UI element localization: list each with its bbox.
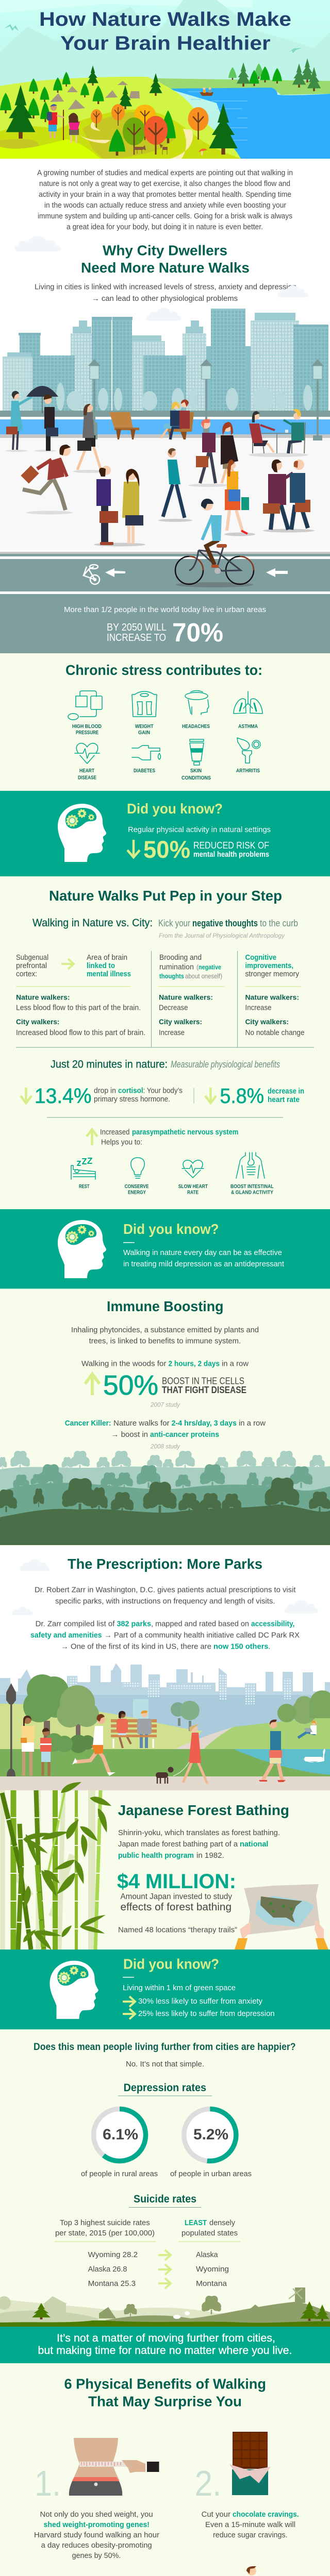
icon: bike lane marking <box>84 565 100 584</box>
suicide table: Wyoming 28.2 <box>88 2251 138 2259</box>
comparison table: Nature walkers: <box>16 993 70 1002</box>
icon: lungs <box>234 691 262 714</box>
text: Shinrin-yoku, which translates as forest bathing. <box>118 1829 280 1837</box>
heading: 6 Physical Benefits of Walking <box>64 2376 266 2392</box>
lake <box>168 88 330 159</box>
hikers <box>47 104 80 143</box>
label: SKIN <box>190 768 202 774</box>
label: HEART <box>79 768 94 774</box>
street lamps <box>88 359 324 440</box>
label: ASTHMA <box>238 724 258 730</box>
cancer killer text: Cancer Killer: <box>65 1419 111 1428</box>
promenade <box>0 411 330 550</box>
icon: waist with tape <box>69 2438 159 2496</box>
text: reduce sugar cravings. <box>213 2531 288 2539</box>
label: CONDITIONS <box>182 775 211 781</box>
panel: happier question <box>0 2029 330 2327</box>
intro text: a great idea for your body, but doing it in nature is even better. <box>67 223 263 231</box>
comparison table: cortex: <box>16 970 37 978</box>
stat 50%: REDUCED RISK OF <box>193 840 269 851</box>
text <box>202 2511 299 2539</box>
people: teal shirt walker <box>158 448 192 522</box>
panel: did you know 2 <box>0 1209 330 1288</box>
arrow up <box>87 1129 97 1145</box>
text <box>118 1829 280 1860</box>
pines <box>6 65 238 155</box>
subheading: From the Journal of Physiological Anthropology <box>159 932 285 939</box>
label: SLOW HEART <box>178 1184 208 1190</box>
stat cortisol: primary stress hormone. <box>94 1095 170 1104</box>
people: couple on bench <box>161 399 194 439</box>
icon: head with gears <box>58 1220 106 1278</box>
lamp post <box>6 1683 16 1776</box>
comparison table: Brooding and <box>159 954 202 962</box>
icon: finger prick <box>132 745 161 760</box>
comparison table: Nature walkers: <box>245 993 299 1002</box>
text: → Part of a community health initiative called DC Park RX <box>104 1632 300 1640</box>
subheading: negative thoughts <box>192 918 258 928</box>
comparison table: improvements, <box>245 962 293 970</box>
swan <box>302 1749 325 1762</box>
number: 1. <box>35 2463 61 2503</box>
title: Your Brain Healthier <box>60 33 271 55</box>
arrow <box>123 1996 135 2007</box>
stat cortisol <box>35 1084 183 1108</box>
arrow down <box>205 1088 216 1103</box>
stat 50%: THAT FIGHT DISEASE <box>162 1385 246 1395</box>
comparison table: Cognitive <box>245 954 276 962</box>
people: woman in grey suit <box>73 404 104 473</box>
arrow up <box>85 1374 100 1395</box>
label <box>178 1184 208 1196</box>
label: WEIGHT <box>135 724 154 730</box>
intro text: A growing number of studies and medical experts are pointing out that walking in <box>37 169 293 177</box>
text: , mapped and rated based on <box>151 1620 249 1629</box>
text: accessibility, <box>251 1620 294 1629</box>
park bench and couple <box>111 1710 157 1748</box>
donut: rural: 6.1% <box>103 2127 138 2143</box>
label: BOOST INTESTINAL <box>230 1184 274 1190</box>
stat $4 million <box>117 1870 237 1935</box>
icon: chocolate bar <box>229 2432 271 2495</box>
comparison table: Increase <box>245 1004 271 1012</box>
label: CONSERVE <box>125 1184 149 1190</box>
comparison table: Subgenual <box>16 954 48 962</box>
stat $4 million: Named 48 locations “therapy trails” <box>118 1926 237 1935</box>
text: Walking in the woods for <box>81 1360 167 1368</box>
benefit 1 <box>34 2438 159 2560</box>
arrow: bike lane left <box>105 568 125 577</box>
subheading: just 20 minutes: Just 20 minutes in nature: <box>51 1059 168 1071</box>
subheading: Kick your <box>158 918 190 928</box>
banner: conclusion <box>0 2327 330 2363</box>
comparison table: about oneself) <box>185 972 222 980</box>
text: Even a 15-minute walk will <box>205 2521 295 2529</box>
comparison table: linked to <box>87 962 115 970</box>
comparison table: City walkers: <box>16 1018 60 1026</box>
suicide table: densely <box>209 2219 236 2227</box>
stat 50% <box>143 836 269 863</box>
icon: head with gears <box>58 804 106 862</box>
people: bald man and woman in yellow <box>94 466 145 546</box>
park people: woman in red and dog <box>156 1723 207 1784</box>
comparison table: prefrontal <box>16 962 47 970</box>
panel: hero illustration <box>0 0 330 159</box>
source: 2007 study <box>150 1401 180 1409</box>
cloud <box>14 236 60 251</box>
stat 50%: mental health problems <box>193 850 269 859</box>
label: REST <box>79 1184 90 1190</box>
people: umbrella pair <box>5 386 58 452</box>
comparison table: negative <box>199 963 221 971</box>
banner: conclusion: It’s not a matter of moving further from cities, <box>57 2332 275 2344</box>
text: in a row <box>222 1360 249 1368</box>
benefit 4 <box>183 2566 311 2576</box>
text: chocolate cravings. <box>233 2511 299 2519</box>
label <box>230 1184 274 1196</box>
stat 50%: 50% <box>143 836 190 863</box>
subheading: just 20 minutes <box>51 1059 280 1071</box>
cancer killer text: in a row <box>239 1419 266 1428</box>
clouds <box>12 1559 318 1615</box>
suicide table: per state, 2015 (per 100,000) <box>55 2229 155 2238</box>
suicide table <box>54 2219 241 2289</box>
panel: 6 physical benefits <box>0 2363 330 2576</box>
comparison table: Decrease <box>159 1004 188 1012</box>
park lawns <box>0 1704 330 1790</box>
heading: Nature Walks Put Pep in your Step <box>49 888 282 904</box>
heading: Japanese Forest Bathing <box>118 1802 289 1818</box>
park skyline <box>0 1663 330 1751</box>
heading <box>81 242 250 276</box>
stat 50% <box>103 1370 246 1401</box>
text <box>123 1248 285 1268</box>
icon: bulb <box>131 1158 144 1178</box>
text: Not only do you shed weight, you <box>40 2511 153 2519</box>
urban stat: 70% <box>172 618 223 647</box>
text: Cut your <box>202 2511 230 2519</box>
stat $4 million: $4 MILLION: <box>117 1870 236 1893</box>
number: 2. <box>195 2463 222 2503</box>
label: DISEASE <box>78 775 96 781</box>
text: Walking in nature every day can be as effective <box>123 1248 282 1257</box>
intro text: immune system and building up anti-cancer cells. Going for a brisk walk is always <box>38 212 292 221</box>
icon: arthritis joint <box>237 738 260 763</box>
parasympathetic text: Increased <box>100 1128 129 1137</box>
intro text <box>37 169 293 231</box>
text <box>71 1326 259 1368</box>
panel: did you know 3 <box>0 1950 330 2029</box>
stat 50%: BOOST IN THE CELLS <box>162 1376 244 1386</box>
panel: intro <box>14 169 293 251</box>
heading <box>64 2376 266 2410</box>
text: shed weight-promoting genes! <box>43 2521 150 2529</box>
text: in 1982. <box>196 1852 224 1860</box>
heading: Did you know? <box>127 801 223 817</box>
heading: depression rates: Depression rates <box>124 2082 206 2094</box>
cancer killer text: → boost in <box>111 1431 148 1439</box>
depression stat: 25% less likely to suffer from depression <box>138 2009 275 2018</box>
subheading <box>32 917 298 939</box>
heading: Does this mean people living further from cities are happier? <box>34 2041 296 2053</box>
comparison table: City walkers: <box>245 1018 289 1026</box>
suicide table: Alaska 26.8 <box>88 2265 127 2274</box>
cancer killer text: Nature walks for <box>113 1419 170 1428</box>
heading: Why City Dwellers <box>103 242 227 259</box>
pale trees <box>21 383 312 412</box>
cone trees <box>0 72 176 156</box>
arrow down <box>21 1088 31 1103</box>
suicide table: Top 3 highest suicide rates <box>60 2219 150 2227</box>
heading: Immune Boosting <box>107 1298 224 1314</box>
comparison table: Increased blood flow to this part of brain. <box>16 1029 145 1037</box>
text: public health program <box>118 1852 194 1860</box>
mushroom <box>199 148 207 155</box>
stat cortisol: drop in <box>94 1087 116 1095</box>
label: RATE <box>187 1190 199 1196</box>
text: Inhaling phytoncides, a substance emitted by plants and <box>71 1326 259 1334</box>
text: Harvard study found walking an hour <box>34 2531 159 2539</box>
text: → One of the first of its kind in US, there are <box>61 1643 211 1651</box>
text: a day reduces obesity-promoting <box>41 2541 152 2550</box>
text: Dr. Zarr compiled list of <box>36 1620 115 1629</box>
stat $4 million: Amount Japan invested to study <box>121 1892 232 1901</box>
comparison table: No notable change <box>245 1029 304 1037</box>
icon: skin cream tube <box>190 739 204 765</box>
label: HEADACHES <box>182 724 210 730</box>
subheading: Walking in Nature vs. City: <box>32 917 153 929</box>
park trees <box>23 1674 330 1753</box>
text: in treating mild depression as an antidepressant <box>123 1260 285 1268</box>
park people: mother and son <box>21 1716 52 1776</box>
skyline <box>3 309 328 411</box>
text: trees, is linked to benefits to immune system. <box>89 1337 241 1346</box>
panel: chronic stress <box>0 653 330 791</box>
comparison table: Increase <box>159 1029 185 1037</box>
label: ARTHRITIS <box>236 768 260 774</box>
stat heart rate: heart rate <box>268 1096 300 1104</box>
map with hands <box>235 1884 328 1950</box>
bamboo illustration <box>2 1778 113 1952</box>
stat heart rate <box>220 1084 304 1108</box>
donut: rural: of people in rural areas <box>81 2170 158 2178</box>
people: walkers centre <box>188 419 238 487</box>
comparison table: Less blood flow to this part of the brain. <box>16 1004 141 1012</box>
intro text: activity in your brain in a way that promotes better mental health. Spending time <box>39 191 291 199</box>
text: 382 parks <box>117 1620 151 1629</box>
cyclist <box>175 499 254 587</box>
icon: heart <box>75 743 100 764</box>
title <box>39 9 291 55</box>
stat cortisol: cortisol <box>118 1087 143 1095</box>
suicide table: LEAST <box>185 2219 207 2227</box>
icon: headache <box>185 690 209 715</box>
donut: urban: of people in urban areas <box>170 2170 252 2178</box>
urban stat: More than 1/2 people in the world today live in urban areas <box>64 605 266 614</box>
icon: head with gears <box>50 1961 98 2019</box>
comparison table: stronger memory <box>245 970 300 978</box>
clouds <box>146 285 308 321</box>
icon: intestines <box>236 1153 265 1178</box>
heading: Need More Nature Walks <box>81 260 250 276</box>
comparison table: thoughts <box>159 972 184 980</box>
subheading: just 20 minutes: Measurable physiological benefits <box>171 1059 280 1070</box>
anxiety stat: 30% less likely to suffer from anxiety <box>138 1997 262 2006</box>
label: GAIN <box>138 730 150 736</box>
panel: japanese forest bathing <box>0 1778 330 1952</box>
stat heart rate: decrease in <box>268 1088 304 1096</box>
comparison table: Nature walkers: <box>159 993 213 1002</box>
donut: rural <box>81 2109 158 2178</box>
stat 50%: 50% <box>103 1370 158 1401</box>
comparison table: mental illness <box>87 970 131 978</box>
source: 2008 study <box>150 1443 180 1450</box>
urban stat: BY 2050 WILL <box>107 622 167 633</box>
label <box>78 768 96 781</box>
stat heart rate: 5.8% <box>220 1084 264 1108</box>
benefit 2 <box>195 2432 299 2539</box>
farm landscape <box>0 2287 330 2327</box>
label <box>182 768 211 781</box>
label: ENERGY <box>128 1190 146 1196</box>
text: safety and amenities <box>30 1632 102 1640</box>
urban stat: INCREASE TO <box>107 632 166 643</box>
people: running man <box>21 445 73 514</box>
bench <box>109 412 139 439</box>
comparison table: rumination <box>159 963 194 972</box>
label <box>72 724 102 736</box>
label: HIGH BLOOD <box>72 724 102 730</box>
parasympathetic text: Helps you to: <box>101 1139 142 1147</box>
donut: urban: 5.2% <box>193 2127 228 2143</box>
subheading: to the curb <box>260 918 298 928</box>
text: Regular physical activity in natural settings <box>128 825 271 834</box>
arrow down <box>127 840 140 857</box>
arrow: cycle lane left <box>266 568 288 577</box>
text: Dr. Robert Zarr in Washington, D.C. gives patients actual prescriptions to visit <box>35 1586 296 1595</box>
text: . <box>268 1643 270 1651</box>
comparison table <box>16 951 314 1047</box>
banner: conclusion: but making time for nature no matter where you live. <box>38 2345 292 2357</box>
stat $4 million: effects of forest bathing <box>121 1902 232 1913</box>
title: How Nature Walks Make <box>39 9 291 30</box>
people: two men right <box>263 460 315 533</box>
city text: → can lead to other physiological problems <box>92 295 238 303</box>
suicide table: Montana 25.3 <box>88 2280 136 2288</box>
far shore <box>155 78 330 95</box>
text: Living within 1 km of green space <box>123 1984 236 1992</box>
text: Japan made forest bathing part of a <box>118 1840 238 1849</box>
panel: the prescription <box>0 1546 330 1790</box>
deer <box>134 144 168 155</box>
heading: suicide rates: Suicide rates <box>134 2193 196 2205</box>
birds <box>4 24 302 53</box>
road <box>0 550 330 653</box>
text <box>30 1586 300 1651</box>
urban stat <box>64 605 266 647</box>
panel: why city dwellers <box>0 242 330 653</box>
autumn trees <box>91 104 208 155</box>
text: national <box>240 1840 268 1849</box>
suicide table: Alaska <box>196 2251 218 2259</box>
forest layers <box>0 1451 330 1545</box>
cancer killer text: anti-cancer proteins <box>150 1431 219 1439</box>
person with laptop <box>298 1720 317 1738</box>
icon: runner with joints <box>229 2566 265 2576</box>
heading: The Prescription: More Parks <box>68 1556 262 1572</box>
icon: slow heart rate <box>182 1160 204 1178</box>
people: woman with shopping bags <box>224 460 255 536</box>
heading: Did you know? <box>123 1956 219 1972</box>
heading: Chronic stress contributes to: <box>65 662 262 678</box>
panel: did you know 1 <box>0 791 330 876</box>
text: specific parks, with instructions on frequency and length of visits. <box>55 1598 275 1606</box>
cancer killer text: 2-4 hrs/day, 3 days <box>172 1419 237 1428</box>
comparison table: Area of brain <box>87 954 127 962</box>
tents <box>50 81 140 110</box>
label <box>135 724 154 736</box>
suicide table: populated states <box>182 2229 238 2238</box>
intro text: nature is not only a great way to get exercise, it also changes the blood flow and <box>39 180 290 188</box>
suicide table: Montana <box>196 2280 227 2288</box>
text: genes by 50%. <box>72 2552 121 2560</box>
people: cafe table <box>249 409 308 457</box>
comparison table: ( <box>196 963 199 971</box>
stat cortisol: 13.4% <box>35 1084 92 1108</box>
intro text: in the woods can actually reduce stress and anxiety while even boosting your <box>44 201 286 210</box>
panel: immune boosting <box>0 1288 330 1546</box>
text: 2 hours, 2 days <box>168 1360 220 1368</box>
park people: runner <box>72 1714 116 1776</box>
donut: urban <box>170 2109 252 2178</box>
parasympathetic text: parasympathetic nervous system <box>132 1128 238 1137</box>
boat <box>200 87 213 96</box>
label: PRESSURE <box>76 730 98 736</box>
heading: Did you know? <box>123 1221 219 1237</box>
label <box>125 1184 149 1196</box>
heading: That May Surprise You <box>88 2394 242 2410</box>
city text <box>35 283 296 303</box>
label: DIABETES <box>134 768 155 774</box>
arrow <box>123 2009 135 2019</box>
comparison table: City walkers: <box>159 1018 202 1026</box>
hill <box>0 77 241 159</box>
cancer killer text <box>65 1419 266 1439</box>
text <box>34 2511 159 2560</box>
icon: bed <box>71 1158 95 1179</box>
city text: Living in cities is linked with increased levels of stress, anxiety and depression <box>35 283 296 292</box>
answer: No. It’s not that simple. <box>126 2060 204 2069</box>
stat cortisol: : Your body’s <box>143 1087 183 1095</box>
icon: blood pressure <box>68 691 102 720</box>
suicide table: Wyoming <box>196 2265 229 2274</box>
park people: man with satchel <box>259 1720 286 1782</box>
label: & GLAND ACTIVITY <box>231 1190 273 1196</box>
panel: nature walks put pep <box>0 876 330 1209</box>
text: now 150 others <box>213 1643 268 1651</box>
parasympathetic text <box>100 1128 238 1147</box>
icon: scale <box>132 691 157 717</box>
